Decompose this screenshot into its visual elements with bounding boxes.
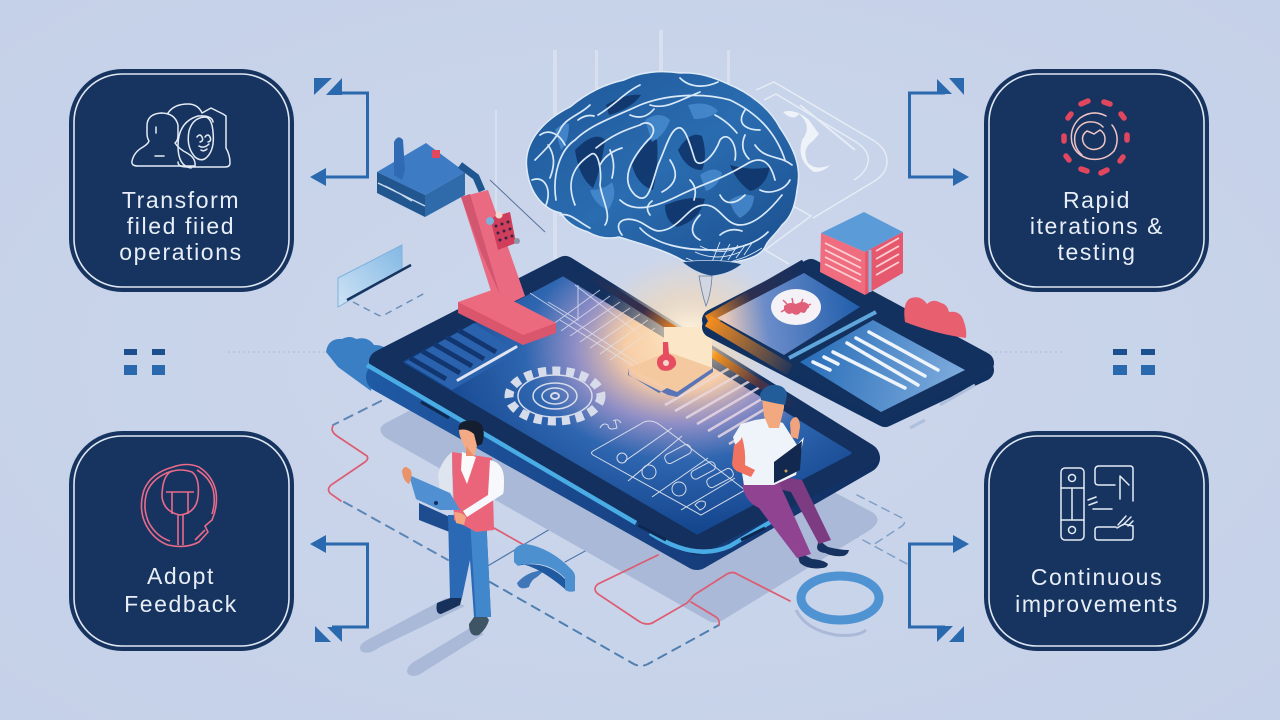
ring: [796, 576, 879, 635]
tablet lower screen: [800, 320, 965, 412]
laptop underside: [419, 503, 452, 533]
phone screen: [405, 278, 850, 533]
shadow: phone on floor: [380, 405, 878, 622]
icon: left dots: [124, 349, 165, 375]
tablet side rim: [910, 385, 975, 428]
arm control panel: [486, 212, 520, 250]
robot arm: [377, 137, 556, 345]
tablet glowing edges: [708, 265, 805, 321]
hand: [402, 467, 412, 484]
phone side: [381, 285, 865, 555]
shoes: [436, 597, 462, 614]
panel: transform field operations: [70, 70, 292, 290]
glowing bezel band: [598, 279, 793, 406]
heading: transform filed fiied operations: Transform: [122, 187, 240, 213]
shirt: [733, 418, 804, 485]
server block: [820, 212, 903, 295]
cerebellum: [686, 242, 762, 265]
arm wire: [490, 180, 545, 232]
head: [458, 420, 484, 446]
phone rim light: [367, 365, 772, 552]
icon: ring of red segments: [1064, 101, 1127, 173]
badge: virus icon: [771, 289, 821, 325]
person standing: [402, 420, 504, 636]
heading: rapid iterations and testing: Rapid: [1063, 187, 1131, 213]
heading: transform filed fiied operations: operations: [119, 239, 243, 265]
glow core and pedestal: [598, 265, 793, 406]
floor circuit lines: [328, 401, 909, 666]
blue handset object: [514, 544, 575, 592]
heading: rapid iterations and testing: iterations &: [1030, 213, 1164, 239]
arrow: bottom left bracket: [310, 535, 369, 642]
heading: continuous improvements: [1015, 564, 1179, 617]
floor red circuit over shadow: [595, 555, 790, 625]
panel: rapid iterations and testing: [986, 70, 1208, 290]
pen: [458, 347, 516, 380]
cloud left blue: [326, 337, 390, 391]
arrow: top left bracket: [310, 78, 369, 186]
heading: continuous improvements: improvements: [1015, 591, 1179, 617]
cloud pink: [904, 297, 966, 338]
icon: red marker: [657, 342, 676, 371]
interface card: [592, 420, 745, 515]
tablet divider: [789, 312, 876, 358]
icon: right dots: [1113, 349, 1155, 375]
right tablet: [708, 265, 983, 428]
arm foot: [458, 290, 556, 345]
heading: adopt feedback: Adopt: [147, 563, 215, 589]
heading: rapid iterations and testing: [1030, 187, 1164, 265]
blueprint hatch: [530, 285, 655, 370]
heading: adopt feedback: [124, 563, 238, 617]
arrow: top right bracket: [908, 78, 969, 186]
icon: pink ring with goblet: [141, 464, 216, 546]
shoes: [817, 539, 849, 556]
heading: transform filed fiied operations: filed fiied: [127, 213, 235, 239]
trousers: [448, 515, 491, 617]
hand: [790, 417, 800, 439]
brain shading: [575, 95, 770, 227]
laptop: [409, 475, 460, 510]
panel: adopt feedback: [70, 432, 292, 650]
robot hub box: [377, 137, 482, 217]
vest and shirt: [452, 452, 494, 532]
arrow: bottom right bracket: [908, 535, 969, 642]
panel: continuous improvements: [986, 432, 1208, 650]
heading: rapid iterations and testing: testing: [1058, 239, 1136, 265]
left list stripes: [410, 330, 496, 379]
phone body: [381, 268, 866, 543]
heading: continuous improvements: Continuous: [1031, 564, 1163, 590]
icon: two people: [132, 104, 230, 168]
trousers: [743, 476, 831, 544]
tablet: [774, 441, 802, 483]
brain folds: [532, 78, 792, 250]
glass panel: [338, 245, 425, 316]
arm body: [461, 190, 525, 310]
hologram outline behind brain: [756, 82, 887, 264]
phone side slots: [421, 402, 765, 540]
tablet upper screen: [717, 273, 860, 355]
tablet text lines: [813, 332, 938, 388]
heading: transform filed fiied operations: [119, 187, 243, 265]
heading: adopt feedback: Feedback: [124, 591, 238, 617]
left list panel: [405, 323, 518, 390]
dial gear: [509, 371, 601, 421]
main phone: [367, 268, 866, 555]
person sitting: [732, 385, 849, 568]
shadow: people: [360, 598, 484, 676]
face and hair: [762, 396, 784, 428]
brain: [526, 72, 799, 306]
icon: process blocks: [1061, 466, 1133, 540]
